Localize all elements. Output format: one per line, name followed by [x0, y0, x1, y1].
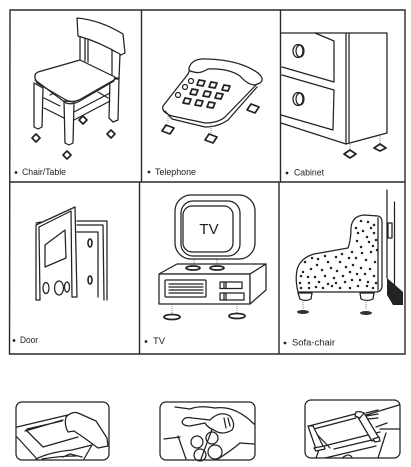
- label: tv: [145, 336, 165, 346]
- label: door: Door: [20, 335, 38, 345]
- door drawing: [36, 207, 107, 300]
- panel: telephone: [148, 59, 262, 177]
- panel: sofa-chair: [284, 190, 403, 348]
- label: sofa-chair: Sofa-chair: [292, 338, 335, 348]
- panel: chair/table: [15, 18, 125, 177]
- panel: door: [13, 207, 107, 345]
- tv drawing: TV: [199, 221, 219, 238]
- foot pads: [344, 134, 386, 158]
- label: tv: TV: [153, 336, 165, 346]
- foot pads: [162, 104, 259, 143]
- icon: fingers holding pad: [182, 414, 234, 433]
- tv drawing: [159, 195, 266, 304]
- wall and skirting: [387, 190, 403, 305]
- icon: pads on frame: [308, 412, 380, 451]
- panel: step 3, pad on furniture: [305, 400, 400, 458]
- foot pads: [32, 116, 115, 159]
- chair drawing: [34, 18, 125, 145]
- cabinet drawing: [281, 33, 387, 144]
- panel: tv: [145, 195, 266, 346]
- sofa-chair drawing: [296, 215, 382, 300]
- panel: step 2, placing pads: [160, 402, 255, 461]
- panel: step 1, cleaning surface: [16, 402, 109, 460]
- icon: pad sheet circles: [191, 432, 222, 461]
- panel: cabinet: [281, 33, 387, 178]
- label: telephone: Telephone: [155, 167, 196, 177]
- foot pads: [164, 258, 245, 320]
- label: chair/table: Chair/Table: [22, 167, 66, 177]
- label: cabinet: Cabinet: [294, 168, 325, 178]
- icon: hand with cloth: [65, 412, 108, 448]
- telephone drawing: [163, 59, 262, 127]
- panel grid: [10, 10, 405, 354]
- foot pads: [297, 300, 372, 315]
